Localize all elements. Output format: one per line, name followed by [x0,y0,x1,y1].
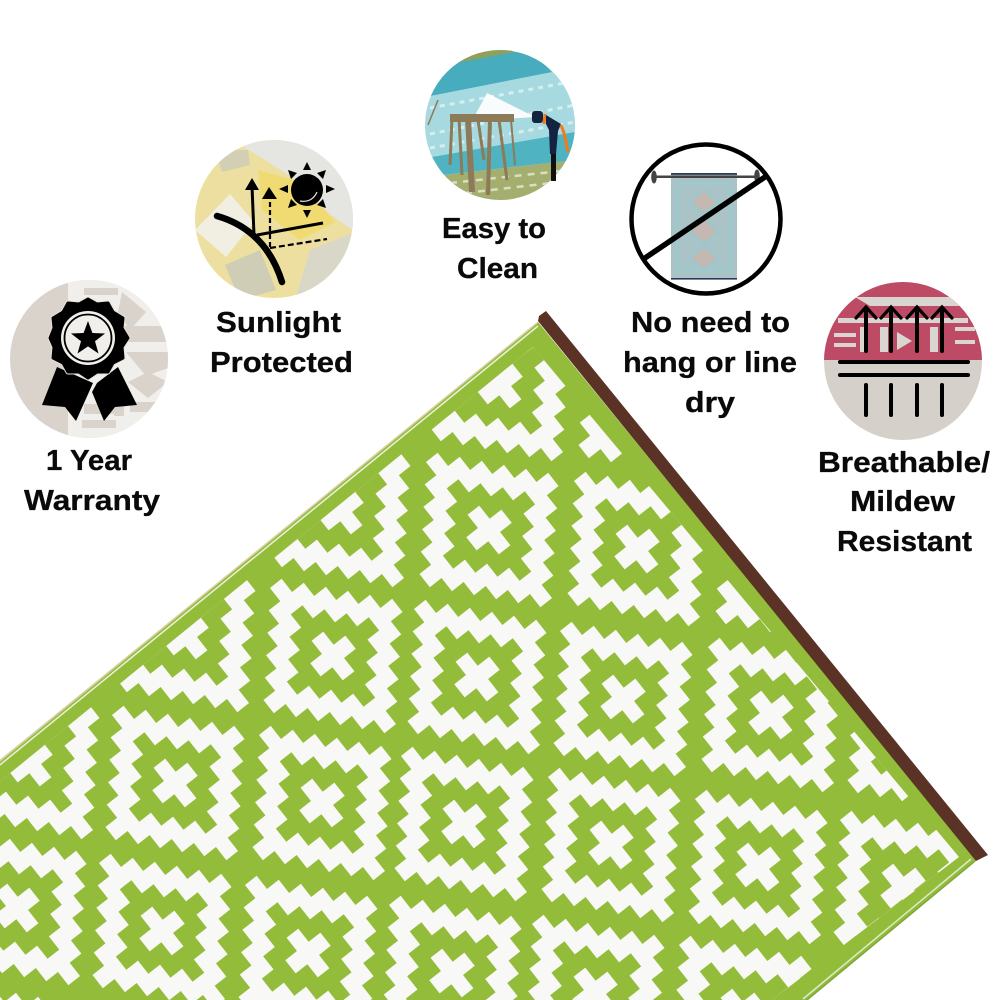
feature: breathable [818,282,990,558]
label: Breathable/ Mildew Resistant: Resistant [837,526,972,558]
feature: no need to hang [623,144,797,419]
label: Sunlight Protected: Protected [210,347,353,379]
feature: sunlight protected [195,140,355,379]
warranty circle photo [9,280,169,440]
label: No need to hang or line dry: hang or line [623,347,797,379]
label: Sunlight Protected [210,307,353,379]
breathable circle photo [824,282,984,442]
sunlight circle photo [195,140,355,300]
feature: warranty [9,280,169,517]
label: Breathable/ Mildew Resistant [818,447,990,558]
label: Easy to Clean: Clean [457,253,538,285]
label: No need to hang or line dry: dry [685,387,735,419]
label: Breathable/ Mildew Resistant: Breathable/ [818,447,990,479]
icon: air flow arrows through layers [840,307,968,415]
rug diamond pattern [0,261,1000,1000]
label: 1 Year Warranty: 1 Year [46,445,132,477]
label: 1 Year Warranty: Warranty [24,485,160,517]
icon: hanging rug with prohibition sign [632,144,780,294]
label: Easy to Clean [442,213,546,285]
label: No need to hang or line dry [623,307,797,419]
label: 1 Year Warranty [24,445,160,517]
label: Sunlight Protected: Sunlight [216,307,341,339]
cleaning circle photo [425,48,575,200]
label: No need to hang or line dry: No need to [631,307,790,339]
rug photo [0,261,1000,1000]
icon: ribbon badge [42,299,137,421]
feature: easy to clean [425,48,575,285]
icon: sun and skin diagram [217,162,335,282]
label: Breathable/ Mildew Resistant: Mildew [850,486,955,518]
label: Easy to Clean: Easy to [442,213,546,245]
icon: hose nozzle [532,111,568,181]
rug brown binding [538,311,988,861]
rug left edge stripes [0,323,975,1000]
rug green base [0,322,977,1000]
